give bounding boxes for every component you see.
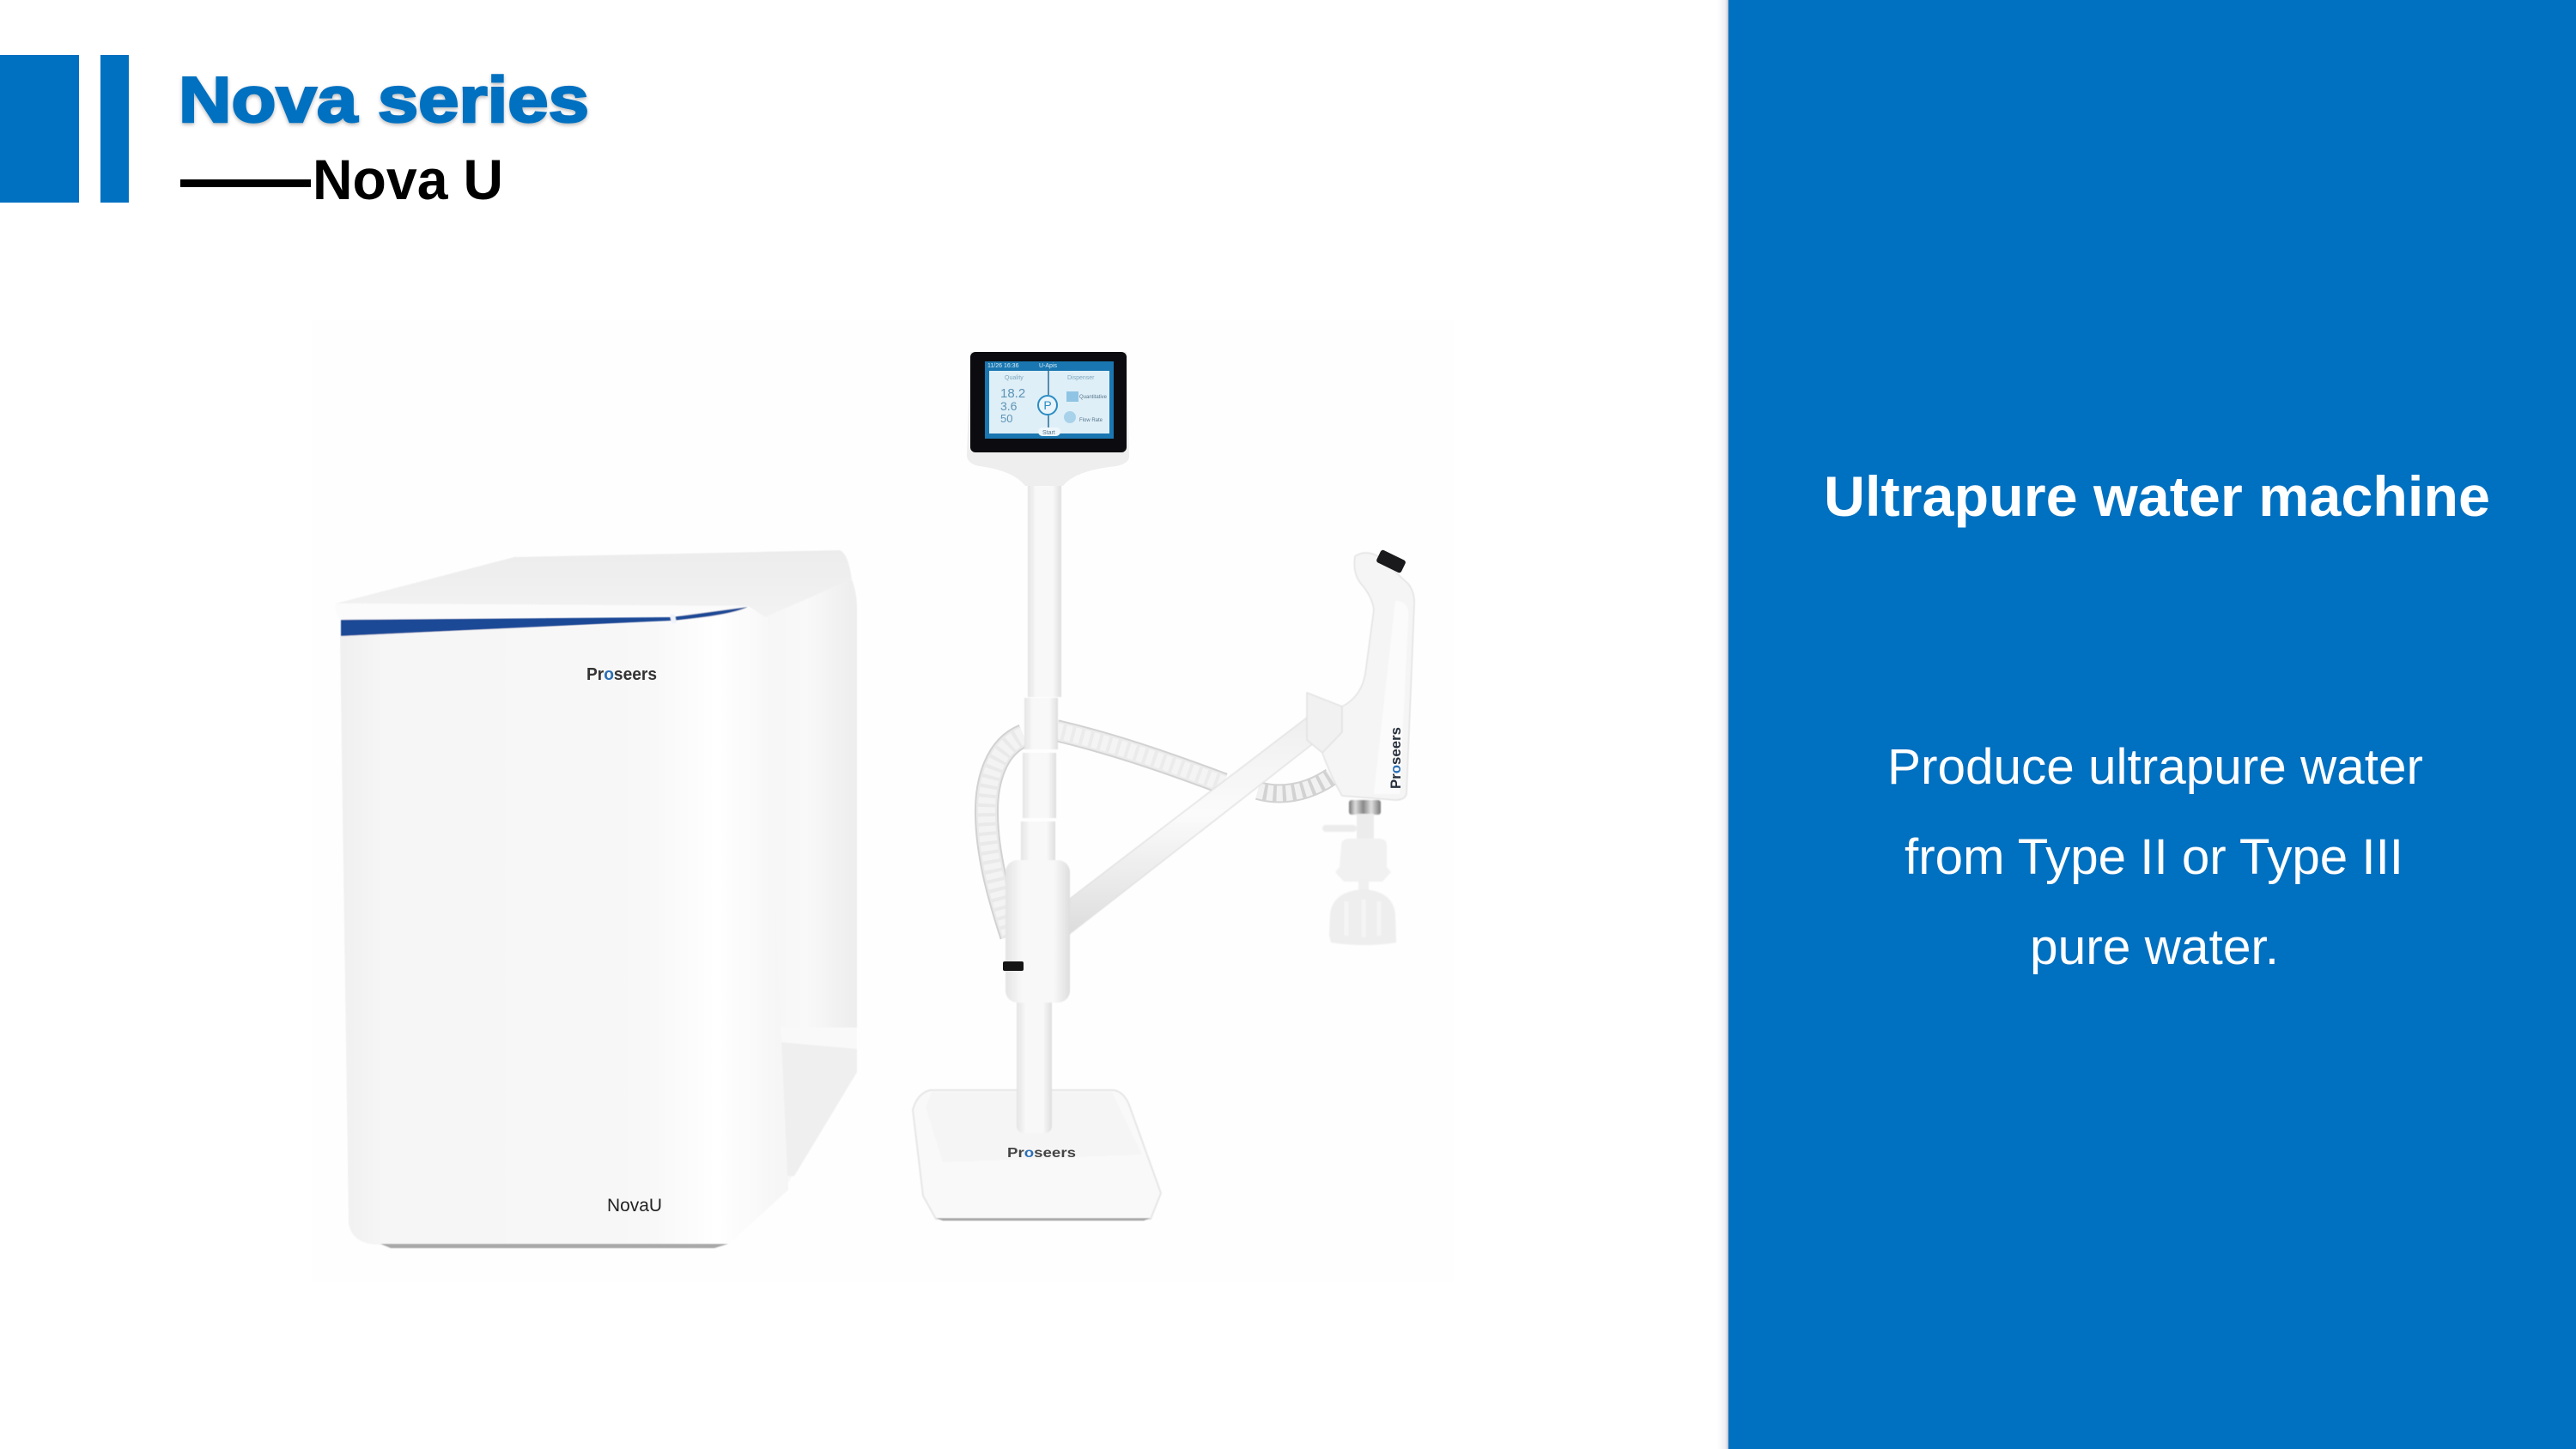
subtitle: Nova U: Nova U — [313, 148, 503, 211]
subtitle: Nova U — [180, 148, 503, 211]
touchscreen display: Start — [1042, 430, 1055, 436]
support arm — [1067, 715, 1315, 936]
touchscreen display: 50 — [1000, 412, 1012, 425]
touchscreen display: 18.2 — [1000, 386, 1025, 401]
panel body text: pure water. — [2030, 919, 2279, 975]
outlet nozzle and filter — [1322, 800, 1396, 945]
dispensing handle — [1307, 553, 1414, 800]
header accent bars — [0, 55, 129, 203]
panel body text: Produce ultrapure water — [1887, 739, 2423, 795]
product photo: Nova U ultrapure water machine — [312, 320, 1454, 1282]
touchscreen display: Quantitative — [1079, 395, 1108, 400]
panel heading: Ultrapure water machine — [1824, 464, 2490, 528]
cabinet unit — [335, 550, 857, 1248]
touchscreen display: Quality — [1005, 375, 1024, 381]
touchscreen display: U-Apis — [1039, 363, 1058, 369]
title: Nova series: Nova series — [179, 64, 589, 136]
dispenser base — [913, 1090, 1161, 1221]
corrugated hose — [987, 731, 1331, 936]
touchscreen display: Dispenser — [1067, 375, 1095, 381]
handle knob — [1376, 549, 1406, 573]
cabinet model label: NovaU — [607, 1196, 662, 1216]
touchscreen display: P — [1043, 398, 1052, 412]
panel: product description — [1717, 0, 2576, 1449]
base brand label: Proseers — [1007, 1146, 1076, 1161]
panel body text — [1887, 739, 2423, 975]
cabinet brand label: Proseers — [586, 665, 657, 684]
panel body text: from Type II or Type III — [1905, 829, 2403, 885]
handle brand label: Proseers — [1388, 727, 1404, 789]
stand pole and joints — [1005, 472, 1070, 1133]
touchscreen display: Flow Rate — [1079, 418, 1103, 423]
touchscreen display: 3.6 — [1000, 399, 1018, 413]
touchscreen display — [967, 352, 1129, 486]
touchscreen display: 11/26 16:36 — [987, 363, 1019, 369]
joint indicator — [1003, 961, 1024, 971]
